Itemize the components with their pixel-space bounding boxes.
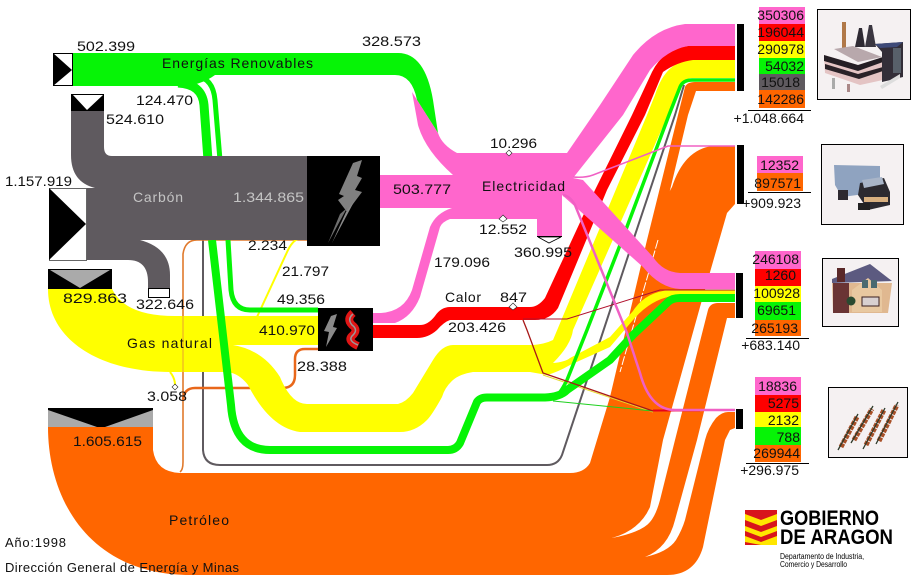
label: 1.344.865: 1.344.865 [233, 189, 304, 205]
table: agricultura: 788 [777, 429, 800, 445]
flow: petróleo (orange) [48, 82, 735, 575]
label: Calor: Calor [445, 289, 481, 305]
label: 524.610: 524.610 [106, 111, 164, 127]
label: renovables total: 502.399 [77, 38, 135, 54]
label: Energías Renovables: Energías Renovables [162, 55, 313, 71]
flow: calor (red) [373, 46, 735, 411]
label: 124.470: 124.470 [136, 92, 193, 108]
table: agricultura: +296.975 [740, 462, 799, 478]
flow: electricidad (pink) [373, 24, 735, 410]
flow: energías renovables (green) [72, 53, 735, 450]
table: hogar [741, 251, 809, 353]
table: industria: +1.048.664 [734, 110, 804, 126]
table: hogar: 1260 [765, 267, 796, 283]
label: source: Dirección General de Energía y Minas [5, 560, 240, 575]
table: hogar: 100928 [753, 285, 800, 301]
table: transporte [742, 156, 811, 211]
label: 49.356: 49.356 [277, 291, 325, 307]
flow: carbón to industry (grey line) [203, 85, 684, 465]
label: 829.863: 829.863 [63, 290, 127, 306]
icon: power station lightning box [307, 156, 380, 246]
flow: carbón (grey) [49, 111, 307, 288]
input: carbón import triangle [49, 188, 86, 260]
label: 360.995: 360.995 [514, 244, 572, 260]
icon: house [822, 258, 898, 326]
table: industria: 15018 [761, 74, 800, 90]
label: to electricity: 328.573 [362, 33, 421, 49]
output: carbón exit box [148, 288, 170, 298]
label: 847: 847 [500, 289, 527, 305]
logo: Gobierno de Aragón: DE ARAGON [780, 526, 893, 549]
table: industria: 290978 [757, 41, 804, 57]
orange line over yellow [182, 316, 184, 372]
label: 28.388: 28.388 [297, 358, 347, 374]
table: agricultura: 18836 [758, 378, 797, 394]
table: hogar: +683.140 [741, 337, 800, 353]
label: Carbón: Carbón [133, 189, 183, 205]
input: gas natural triangle [48, 269, 112, 289]
label: 12.552: 12.552 [479, 221, 527, 237]
table: agricultura: 2132 [768, 412, 799, 428]
table: industria: 54032 [765, 58, 804, 74]
logo: Gobierno de Aragón: Comercio y Desarrollo [780, 560, 847, 569]
label: 2.234: 2.234 [248, 237, 287, 253]
label: 503.777: 503.777 [393, 181, 451, 197]
input: carbón local triangle [71, 94, 104, 111]
table: hogar: 69651 [757, 302, 796, 318]
table: industria: 350306 [757, 7, 804, 23]
label: 1.605.615: 1.605.615 [73, 433, 142, 449]
icon: truck [822, 144, 904, 224]
flow: petróleo branches (orange lines) [180, 239, 318, 472]
table: transporte: +909.923 [742, 195, 801, 211]
table: industria: 142286 [757, 91, 804, 107]
label: 21.797: 21.797 [282, 263, 329, 279]
table: industria [734, 7, 811, 126]
icon: cogeneration box [318, 308, 373, 351]
logo: Gobierno de Aragón: Departamento de Industria, [780, 552, 864, 561]
flow: gas natural (yellow) [48, 60, 735, 432]
label: 1.157.919: 1.157.919 [5, 173, 72, 189]
label: Electricidad: Electricidad [482, 178, 565, 194]
label: Petróleo: Petróleo [169, 512, 229, 528]
logo: Gobierno de Aragón: GOBIERNO [780, 507, 879, 530]
icon: factory [818, 10, 910, 100]
label: 410.970: 410.970 [259, 322, 315, 338]
table: hogar: 265193 [751, 320, 798, 336]
electricidad exit triangle [537, 236, 562, 243]
table: transporte: 12352 [760, 157, 799, 173]
label: 203.426: 203.426 [448, 319, 506, 335]
label: year: Año:1998 [5, 535, 66, 550]
label: Gas natural: Gas natural [127, 335, 212, 351]
consumption bars [736, 24, 744, 429]
table: transporte: 897571 [754, 175, 801, 191]
input: petróleo triangles [48, 408, 153, 427]
label: 10.296: 10.296 [490, 135, 537, 151]
table: hogar: 246108 [752, 251, 799, 267]
logo: Gobierno de Aragón [745, 507, 893, 569]
label: 3.058: 3.058 [147, 388, 187, 404]
table: agricultura [740, 377, 809, 478]
table: industria: 196044 [757, 24, 804, 40]
input: renovables triangle [53, 53, 72, 86]
small loss diamonds [172, 150, 517, 390]
table: agricultura: 269944 [753, 445, 800, 461]
table: agricultura: 5275 [768, 395, 799, 411]
label: 322.646: 322.646 [136, 296, 194, 312]
icon: wheat [828, 388, 908, 458]
label: 179.096: 179.096 [434, 254, 490, 270]
